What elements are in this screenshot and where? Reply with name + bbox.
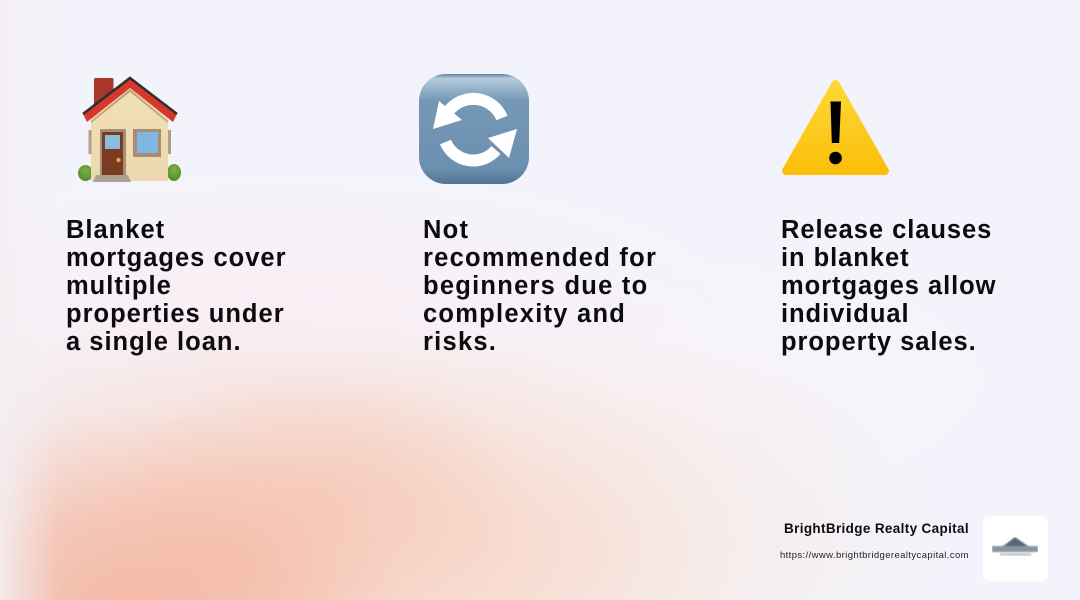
icon: warning triangle [782,80,889,175]
text: blanket mortgages: mortgages cover [66,244,286,272]
logo card [983,516,1048,581]
text: release clauses: individual [781,300,910,328]
text: blanket mortgages: a single loan. [66,328,242,356]
text: blanket mortgages [66,216,286,356]
text: release clauses: property sales. [781,328,977,356]
text: release clauses [781,216,996,356]
text: not recommended: complexity and [423,300,626,328]
brand url: https://www.brightbridgerealtycapital.com [780,550,969,561]
text: not recommended [423,216,657,356]
text: not recommended: beginners due to [423,272,648,300]
text: blanket mortgages: Blanket [66,216,165,244]
text: blanket mortgages: properties under [66,300,285,328]
text: not recommended: risks. [423,328,497,356]
text: release clauses: mortgages allow [781,272,996,300]
brand name: BrightBridge Realty Capital [784,521,969,536]
icon: house [78,76,181,182]
text: release clauses: in blanket [781,244,910,272]
text: not recommended: recommended for [423,244,657,272]
text: release clauses: Release clauses [781,216,992,244]
icon: refresh arrows [419,74,529,184]
text: not recommended: Not [423,216,469,244]
text: blanket mortgages: multiple [66,272,172,300]
